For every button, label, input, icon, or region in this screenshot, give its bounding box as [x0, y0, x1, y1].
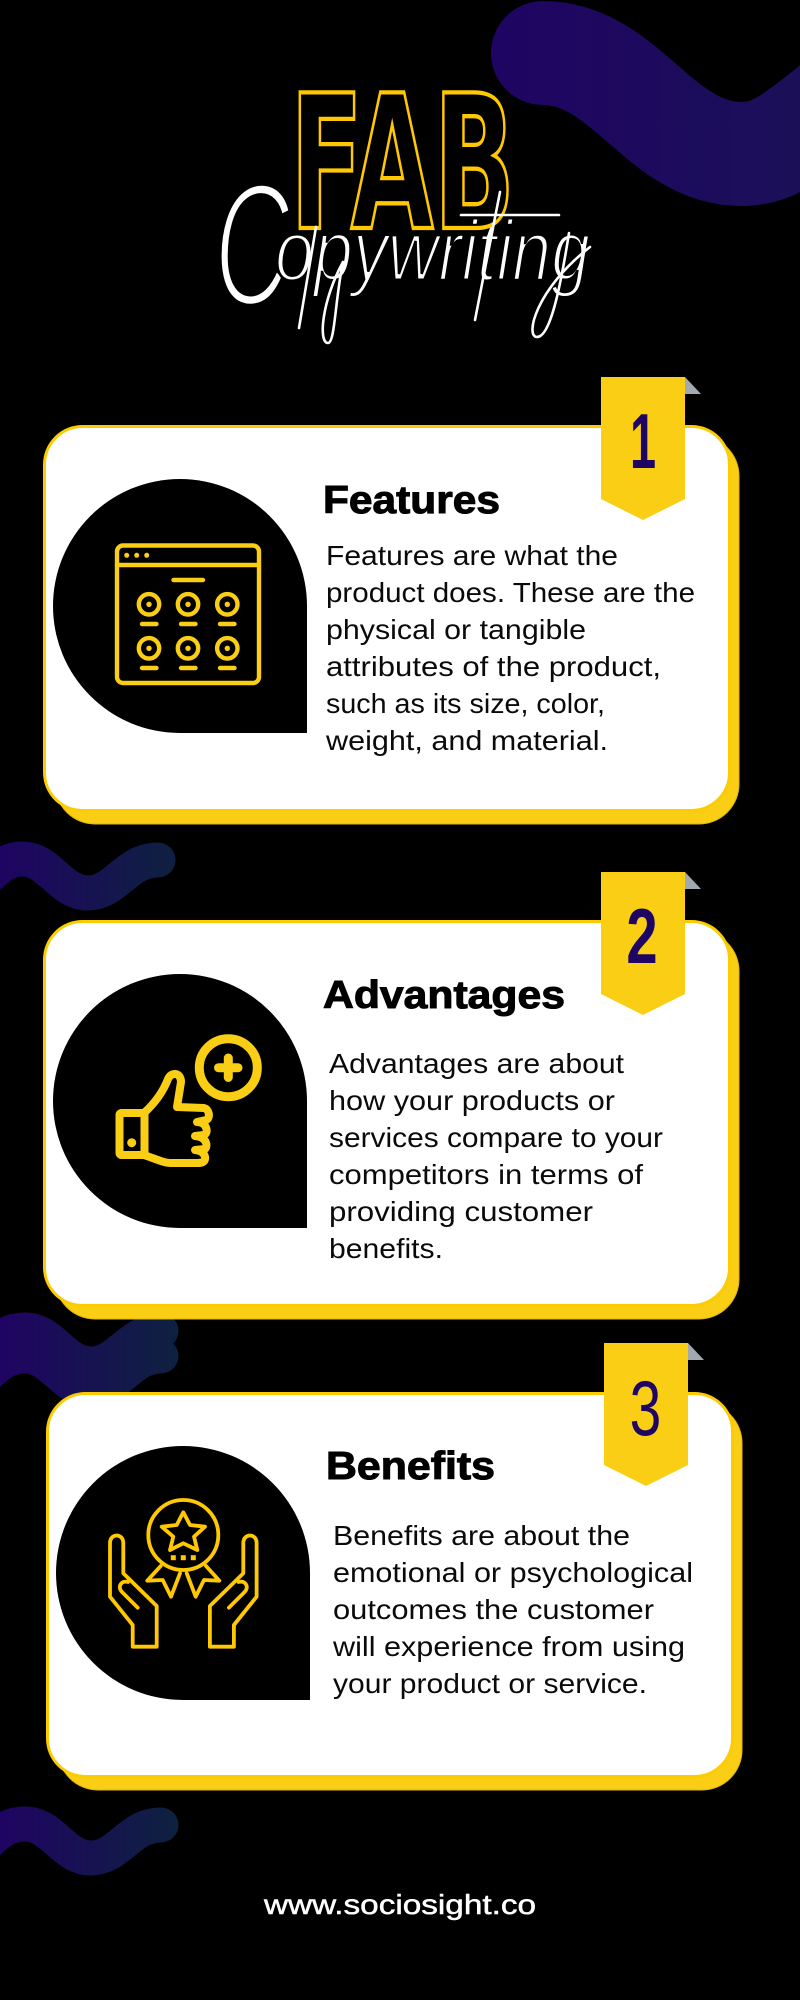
ribbon with number 2: 2: [626, 893, 658, 980]
text block: how your products or: [329, 1085, 615, 1116]
text block: competitors in terms of: [329, 1159, 643, 1190]
text block: your product or service.: [333, 1668, 647, 1699]
ribbon with number 1: [601, 377, 701, 520]
decorative wave: left upper: [0, 859, 158, 893]
heading: Features: [323, 479, 500, 522]
title word: FAB: FAB: [290, 55, 515, 272]
card background: [48, 1394, 742, 1790]
panel: advantages: [44, 872, 739, 1319]
text block: will experience from using: [332, 1631, 685, 1662]
title word: Copywriting: [214, 148, 590, 343]
ribbon with number 3: 3: [630, 1365, 661, 1452]
card background: [44, 426, 739, 824]
text block: [329, 1048, 663, 1264]
text block: such as its size, color,: [326, 688, 605, 719]
text block: Benefits are about the: [333, 1520, 630, 1551]
panel: benefits: [48, 1343, 742, 1790]
title: [214, 55, 590, 343]
text block: Advantages are about: [329, 1048, 624, 1079]
panel: features: [44, 377, 739, 824]
icon: hands holding award medal: [110, 1500, 257, 1647]
decorative wave: left lower: [0, 1824, 161, 1858]
heading: Advantages: [323, 974, 565, 1017]
text block: [332, 1520, 693, 1699]
text block: providing customer: [329, 1196, 593, 1227]
ribbon with number 1: 1: [630, 398, 656, 485]
title flourishes: [299, 192, 590, 343]
text block: attributes of the product,: [326, 651, 661, 682]
text block: outcomes the customer: [333, 1594, 654, 1625]
decorative wave: left middle: [0, 1330, 161, 1390]
icon badge: [53, 479, 307, 733]
text block: weight, and material.: [325, 725, 608, 756]
icon badge: [56, 1446, 310, 1700]
heading: Benefits: [326, 1445, 495, 1488]
icon badge: [53, 974, 307, 1228]
text block: Features are what the: [326, 540, 618, 571]
text block: benefits.: [329, 1233, 443, 1264]
text block: services compare to your: [329, 1122, 663, 1153]
text block: emotional or psychological: [333, 1557, 693, 1588]
ribbon with number 3: [604, 1343, 704, 1486]
title word: Copywriting: C: [214, 148, 291, 343]
text block: physical or tangible: [326, 614, 586, 645]
card background: [44, 922, 739, 1319]
icon: thumbs up with plus: [120, 1039, 257, 1163]
footer website url: www.sociosight.co: [263, 1889, 536, 1920]
text block: [325, 540, 695, 756]
ribbon with number 2: [601, 872, 701, 1015]
decorative wave: top right: [543, 53, 800, 154]
title word: Copywriting: opywriting: [275, 204, 590, 299]
icon: app window grid: [117, 546, 259, 683]
text block: product does. These are the: [326, 577, 695, 608]
